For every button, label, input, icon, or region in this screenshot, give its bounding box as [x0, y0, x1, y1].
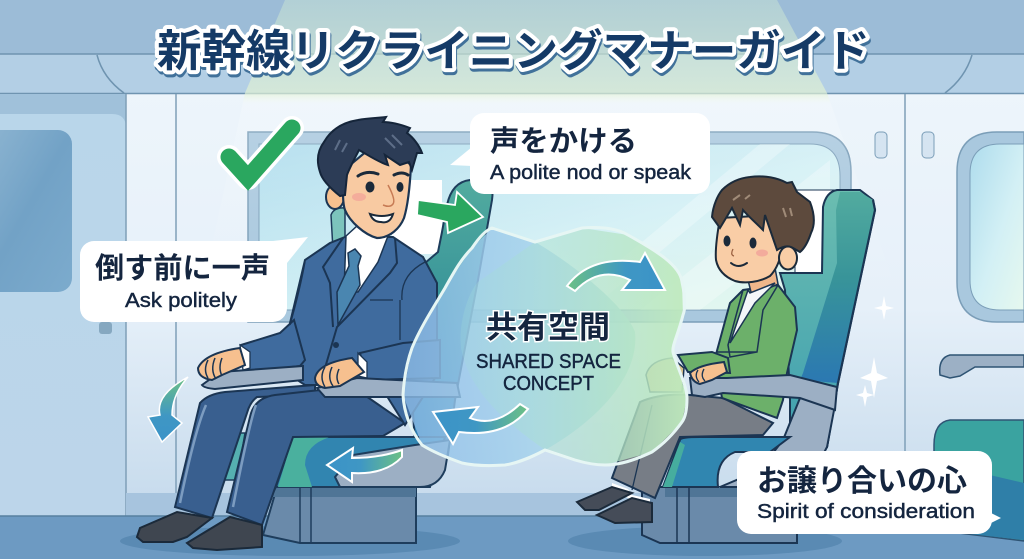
- hair: [318, 117, 422, 196]
- speech bubble: お譲り合いの心: お譲り合いの心: [757, 465, 967, 498]
- trousers: [612, 395, 773, 498]
- arrow: left downward: [148, 377, 188, 442]
- title: 新幹線リクライニングマナーガイド: [157, 27, 870, 76]
- eyes and eyebrows: [366, 182, 374, 192]
- shared space label: CONCEPT: [503, 373, 594, 395]
- window: right: [957, 132, 1024, 322]
- face: [343, 140, 411, 238]
- near shoe: [187, 517, 262, 550]
- neck: [748, 268, 778, 296]
- far seat: [934, 355, 1024, 541]
- speech bubble: 声をかける: [450, 113, 710, 194]
- jacket: [715, 285, 797, 418]
- speech bubble: 倒す前に一声: [80, 237, 308, 322]
- near armrest: [317, 378, 460, 397]
- shirt: [344, 226, 388, 292]
- far sleeve: [241, 320, 305, 372]
- man seat: [120, 180, 493, 556]
- speech bubble: お譲り合いの心: Spirit of consideration: [757, 501, 975, 523]
- hand: [690, 362, 727, 384]
- far armrest: [202, 366, 303, 389]
- tie: [337, 249, 361, 325]
- face: [716, 215, 782, 282]
- socks: [612, 483, 650, 505]
- man in suit: [137, 117, 460, 550]
- shared space blob: [403, 227, 687, 466]
- shoes: [577, 487, 632, 510]
- shirt: [730, 283, 775, 343]
- boy seat: [568, 190, 875, 556]
- far shoe: [137, 512, 212, 542]
- near cuff: [358, 353, 367, 378]
- arrow: seat cushion: [327, 448, 402, 482]
- hair: [712, 176, 814, 252]
- armrest: [690, 375, 837, 410]
- check mark: [229, 128, 292, 178]
- speech bubble: お譲り合いの心: [737, 451, 992, 534]
- speech bubble: 倒す前に一声: 倒す前に一声: [95, 252, 270, 285]
- far cuff: [240, 345, 250, 370]
- boy in green jacket: [577, 176, 837, 523]
- near hand: [315, 358, 364, 388]
- sparkles: [856, 296, 1001, 523]
- shared space label: SHARED SPACE: [476, 351, 621, 373]
- near sleeve: [360, 340, 440, 380]
- smile: [370, 214, 393, 222]
- speech bubble: 声をかける: A polite nod or speak: [490, 162, 692, 184]
- ceiling light beam: [200, 0, 900, 300]
- near leg and lap: [227, 385, 405, 525]
- speech bubble: 声をかける: 声をかける: [490, 125, 637, 158]
- speech bubble: 倒す前に一声: Ask politely: [125, 290, 237, 312]
- far hand: [198, 348, 245, 380]
- window: center: [248, 132, 934, 322]
- ear: [326, 185, 344, 209]
- arrow: curved lower of shared space: [433, 404, 528, 444]
- shared space label: 共有空間: [486, 310, 610, 345]
- ear: [779, 246, 797, 270]
- far leg: [175, 385, 315, 518]
- lapels: [320, 238, 397, 385]
- arrow: green to seat: [417, 192, 483, 233]
- shared space label: [476, 310, 621, 395]
- far hand under shared space: [646, 358, 684, 392]
- eyes and mouth: [724, 236, 730, 246]
- collar and lapel lines: [716, 285, 778, 357]
- arrow: curved top of shared space: [567, 253, 665, 291]
- jacket: [285, 237, 437, 425]
